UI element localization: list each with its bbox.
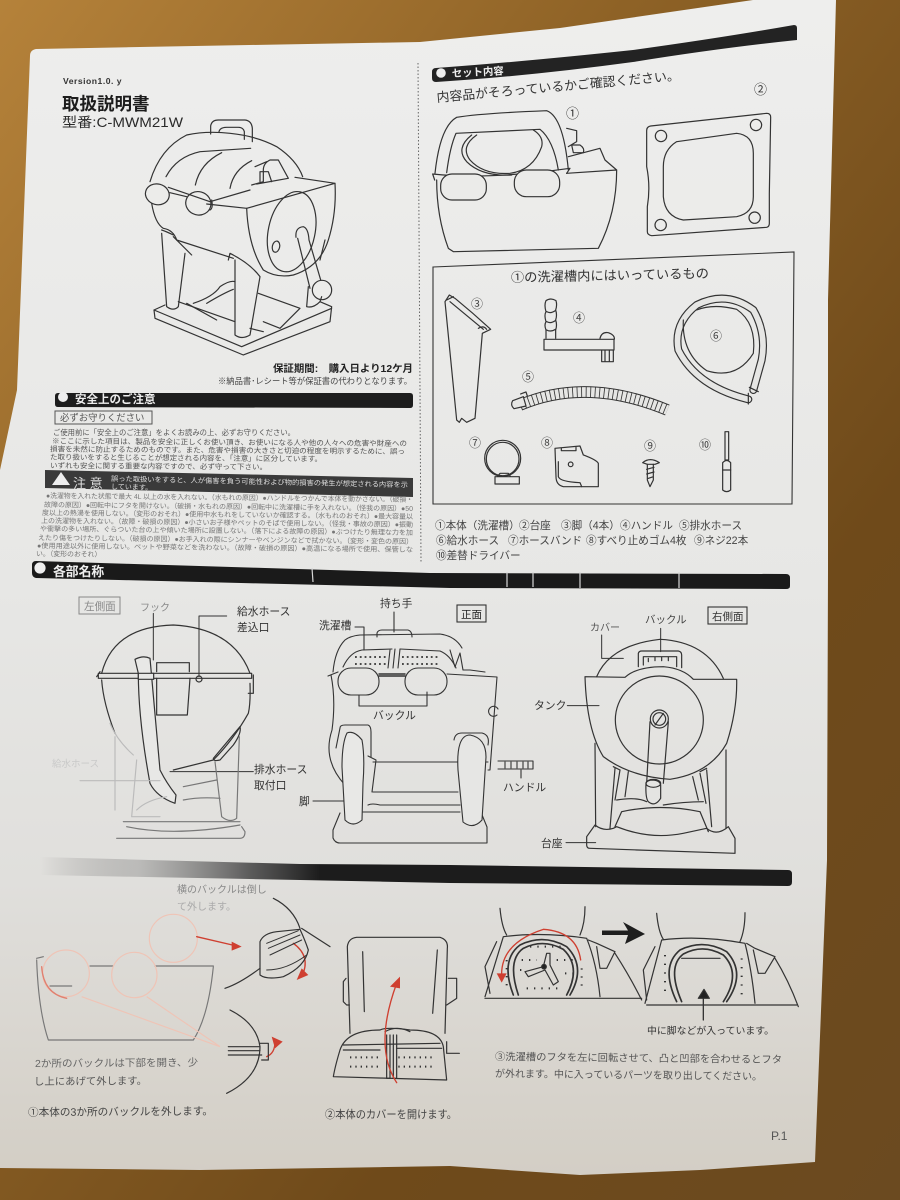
part number labels 3 to 10: ⑩ (699, 438, 711, 452)
step 3 caption: が外れます。中に入っているパーツを取り出してください。 (495, 1067, 762, 1083)
step 1 note: 2か所のバックルは下部を開き、少 (35, 1056, 198, 1070)
section bar: part names (32, 561, 790, 589)
faded note: side buckle (177, 883, 267, 913)
section bar: preparation (40, 857, 792, 886)
view tag: right (708, 607, 747, 624)
header: version, title and model (62, 76, 183, 130)
view tag: front: 正面 (461, 609, 482, 621)
caution banner: しています。 (111, 483, 152, 492)
step 3 drawing: parts inside (643, 913, 798, 1020)
parts legend: ⑩差替ドライバー (436, 549, 521, 562)
part 2: base plate (647, 113, 771, 236)
caution item list: 上の洗濯物を入れない。（故障・破損の原因）●小さいお子様やペットのそばで使用しない。（怪我・事故の原因）●振動 (41, 516, 413, 529)
label: tub: 洗濯槽 (319, 619, 352, 632)
illustration: assembled washer (143, 120, 335, 355)
left side view (52, 597, 307, 838)
safety introduction text: いずれも安全に関する重要な内容ですので、必ず守って下さい。 (50, 461, 267, 472)
step 3 caption: ③洗濯槽のフタを左に回転させて、凸と凹部を合わせるとフタ (495, 1050, 782, 1066)
parts legend: ⑦ホースバンド (508, 535, 582, 547)
view tag: right: 右側面 (712, 610, 744, 623)
step 1: remove buckles (28, 883, 330, 1119)
front view drawing (313, 612, 533, 843)
part number labels 3 to 10: ⑦ (469, 436, 481, 450)
safety introduction text: ※ここに示した項目は、製品を安全に正しくお使い頂き、お使いになる人や他の人々への危害や財産への (52, 437, 407, 448)
label: cover: カバー (590, 622, 620, 634)
safety introduction text (50, 411, 407, 472)
parts legend (435, 519, 749, 562)
panel: parts inside the tub (433, 252, 794, 504)
safety introduction text: 必ずお守りください (60, 412, 144, 423)
label: drain port: 取付口 (254, 779, 286, 792)
view tag: left (79, 597, 120, 614)
warranty note: 保証期間: 購入日より12ケ月 (273, 362, 413, 375)
caution item list: 故障の原因）●回転中にフタを開けない。（破損・水もれの原因）●回転中に洗濯槽に手を入れない。（怪我の原因）●50 (44, 500, 413, 513)
parts legend: ⑧すべり止めゴム4枚 (586, 534, 687, 547)
label: hook: フック (140, 602, 170, 614)
label: drain port (254, 762, 307, 792)
caution item list: ●洗濯物を入れた状態で最大 4L 以上の水を入れない。（水もれの原因）●ハンドルをつかんで本体を動かさない。（破損・ (46, 491, 413, 504)
part 3: leg (445, 295, 491, 422)
label: drain port: 排水ホース (254, 762, 307, 776)
step 2: open cover (325, 937, 459, 1121)
section bar: set contents: セット内容 (451, 64, 505, 80)
number 1: ① (566, 106, 579, 121)
step 2 drawing (333, 937, 459, 1083)
parts legend: ③脚（4本） (561, 519, 620, 532)
caution item list: や衝撃の多い場所、ぐらついた台の上や傾いた場所に設置しない。（落下による故障の原因）●ぶつけたり無理な力を加 (40, 524, 413, 537)
safety introduction text: ご使用前に「安全上のご注意」をよくお読みの上、必ずお守りください。 (53, 428, 295, 437)
step 2 caption: ②本体のカバーを開けます。 (325, 1107, 457, 1121)
caution banner: 注 意 (73, 476, 103, 491)
faded note: side buckle: 横のバックルは倒し (177, 883, 267, 896)
safety introduction text: た取り扱いをすると生じることが想定される内容を、「注意」に区分しています。 (50, 453, 322, 463)
header: version, title and model: 取扱説明書 (62, 94, 150, 114)
part 8: rubber foot (555, 446, 598, 487)
parts legend: ①本体（洗濯槽） (435, 519, 520, 532)
page number: P.1 (771, 1129, 788, 1143)
label: handle: ハンドル (503, 782, 546, 794)
label: water inlet: 差込口 (237, 621, 269, 634)
label: parts inside: 中に脚などが入っています。 (647, 1024, 774, 1037)
part number labels 3 to 10: ⑤ (522, 370, 534, 384)
step 1 note (34, 1056, 198, 1088)
step 1 note: し上にあげて外します。 (34, 1075, 147, 1088)
part 10: screwdriver (723, 432, 731, 492)
side view drawing (97, 613, 253, 803)
faded note: side buckle: て外します。 (177, 901, 236, 913)
section bar: set contents (432, 25, 797, 82)
caution item list (36, 491, 413, 559)
part number labels 3 to 10: ⑧ (541, 436, 553, 450)
label: water inlet: 給水ホース (237, 605, 290, 618)
label: buckle: バックル (645, 614, 687, 626)
part 5: drain hose (512, 392, 667, 410)
big arrow (602, 922, 645, 944)
part 7: hose band (485, 440, 521, 484)
part number labels 3 to 10: ⑥ (710, 329, 722, 343)
dotted fold line (418, 63, 421, 562)
label: tank: タンク (534, 699, 566, 712)
caution banner: 誤った取扱いをすると、人が傷害を負う可能性および物的損害の発生が想定される内容を示 (111, 474, 408, 489)
parts legend: ④ハンドル (620, 520, 673, 532)
parts drawings 3 to 10 (445, 295, 763, 492)
part 9: screw (643, 460, 659, 487)
step 1 caption: ①本体の3か所のバックルを外します。 (28, 1104, 213, 1119)
caution item list: 度以上の熱湯を使用しない。（変形のおそれ）●使用中水もれをしていないか確認する。（水もれのおそれ）●最大容量以 (42, 508, 413, 521)
section bar: safety notes: 安全上のご注意 (75, 392, 156, 406)
caution item list: えたり傷をつけたりしない。（破損の原因）●お手入れの際にシンナーやベンジンなどで拭かない。（変形・変色の原因） (38, 533, 413, 546)
warranty note (218, 362, 413, 386)
section bar: safety notes (55, 392, 413, 408)
header: version, title and model: 型番:C-MWM21W (62, 115, 183, 130)
part 6: supply hose (677, 299, 763, 404)
step 3 drawing: lid rotating (485, 907, 642, 1000)
caution item list: ●使用用途以外に使用しない。ペットや野菜などを洗わない。（故障・破損の原因）●高温になる場所で使用、保管しな (37, 541, 413, 554)
part number labels 3 to 10: ③ (471, 297, 483, 311)
label: leg: 脚 (299, 794, 310, 808)
caution item list: い。（変形のおそれ） (36, 549, 102, 559)
safety introduction text: 損害を未然に防止するためのものです。また、危害や損害の大きさと切迫の程度を明示するために、誤っ (50, 445, 405, 456)
side view faded stand (117, 737, 245, 838)
number 2: ② (754, 82, 767, 97)
step 3 caption (495, 1050, 782, 1083)
part number labels 3 to 10: ④ (573, 311, 585, 325)
step 1 drawing (37, 898, 330, 1093)
parts legend: ⑥給水ホース (436, 534, 499, 547)
view tag: left: 左側面 (84, 600, 116, 613)
step 3: remove lid (485, 907, 798, 1083)
side view faint lines (80, 723, 167, 817)
front view (299, 596, 546, 843)
right view drawing (566, 628, 737, 853)
label: carrying handle: 持ち手 (380, 596, 413, 610)
part 4: handle (544, 299, 614, 362)
header: version, title and model: Version1.0. y (63, 76, 122, 86)
parts legend: ⑨ネジ22本 (694, 534, 749, 547)
panel heading: ①の洗濯槽内にはいっているもの (511, 266, 709, 285)
part 1: washing tub (433, 111, 617, 252)
caution banner (45, 470, 413, 497)
part number labels 3 to 10 (469, 297, 722, 453)
label: base: 台座 (541, 836, 563, 850)
section bar: part names: 各部名称 (53, 564, 104, 579)
label: buckle: バックル (373, 709, 416, 722)
right side view (534, 607, 747, 853)
faded label: supply hose: 給水ホース (52, 758, 99, 770)
part number labels 3 to 10: ⑨ (644, 439, 656, 453)
label: water inlet (237, 605, 290, 634)
instruction: check contents: 内容品がそろっているかご確認ください。 (436, 68, 680, 105)
parts legend: ②台座 (519, 519, 551, 532)
parts legend: ⑤排水ホース (679, 519, 742, 532)
warranty note: ※納品書･レシート等が保証書の代わりとなります。 (218, 376, 412, 386)
view tag: front (457, 605, 486, 622)
